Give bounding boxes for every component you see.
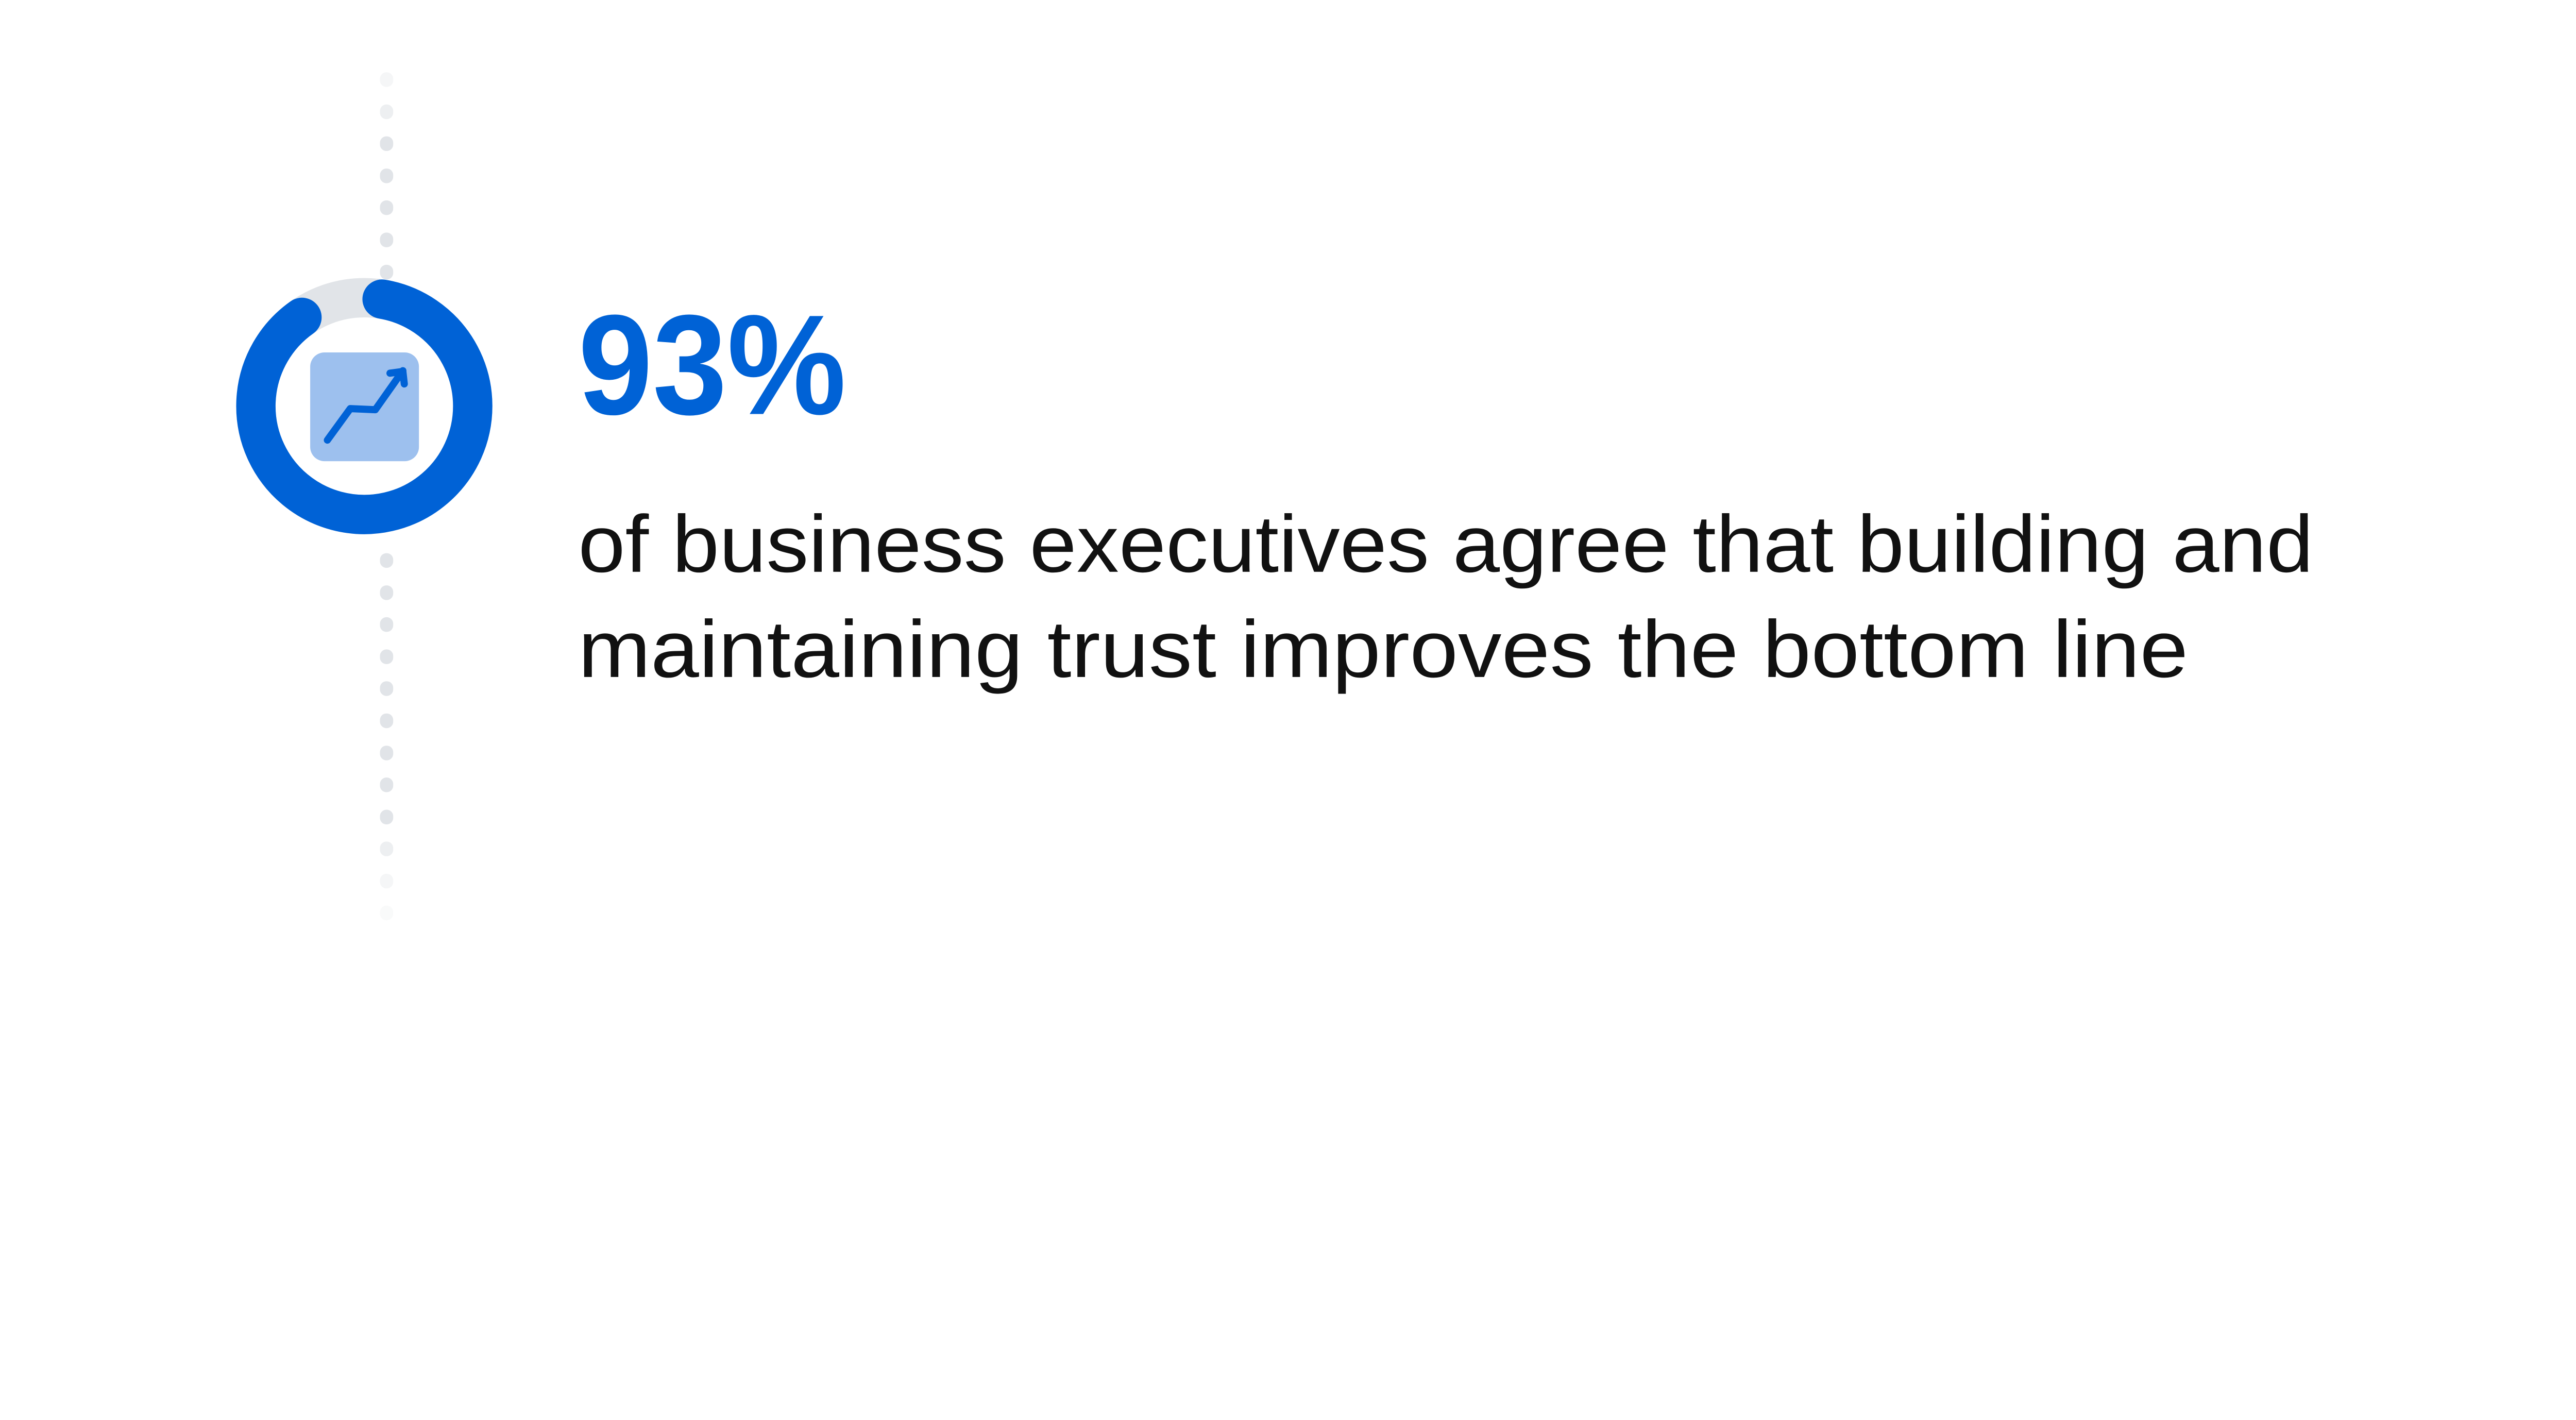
donut chart 93% bbox=[256, 298, 473, 515]
dotted timeline bbox=[380, 72, 393, 920]
description text: of business executives agree that building and bbox=[578, 499, 2313, 589]
description text: maintaining trust improves the bottom line bbox=[578, 604, 2188, 695]
description text bbox=[578, 499, 2313, 695]
icon: growth chart bbox=[310, 352, 419, 461]
headline number: 93% bbox=[578, 285, 846, 444]
